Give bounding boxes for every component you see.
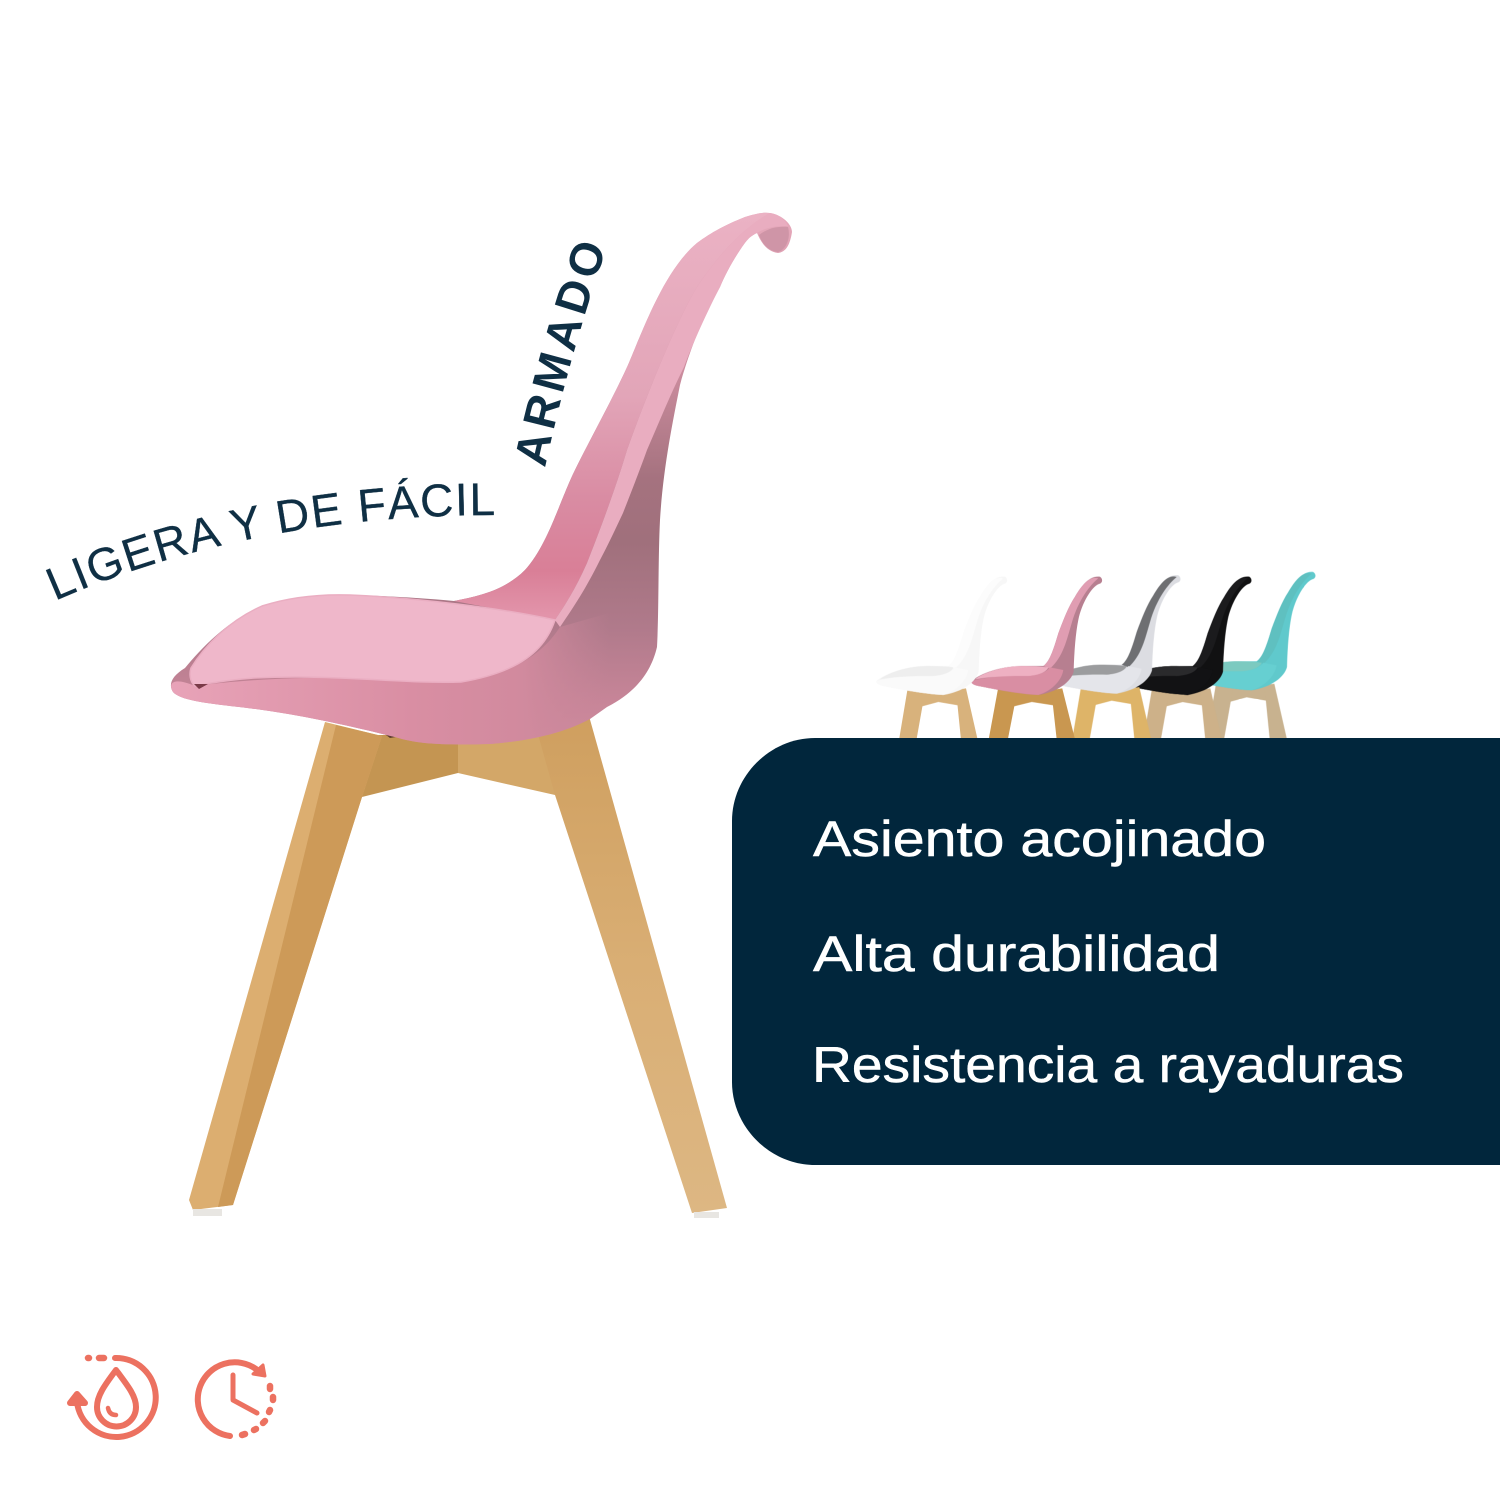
chair legs and crossbar [189,716,727,1218]
chair back rim [555,213,788,627]
small chair: teal [1185,572,1315,745]
curved captions [46,242,602,600]
cushion shadow slit [194,684,208,689]
small chair: black [1121,577,1251,750]
icon: clock cycle [198,1362,273,1436]
chair headrest curl [759,227,789,252]
feature: resistencia a rayaduras: Resistencia a rayaduras [812,1037,1404,1093]
chair back interior [454,213,770,620]
colour variants row [876,572,1315,750]
small chair: gray [1050,575,1180,749]
chair seat side [171,600,655,744]
curved text: armado: ARMADO [516,242,602,467]
feature: alta durabilidad: Alta durabilidad [813,926,1220,982]
main pink chair [171,213,792,1218]
panel background [732,738,1500,1165]
seat cushion [190,595,555,686]
curved text: ligera y de facil: LIGERA Y DE FÁCIL [46,478,494,600]
feature: asiento acojinado: Asiento acojinado [813,811,1266,867]
panel: features [732,738,1500,1165]
small chair: pink [971,577,1102,750]
icon: water cycle drop [70,1358,156,1437]
chair shell silhouette [171,213,792,744]
small chair: white [876,577,1007,750]
